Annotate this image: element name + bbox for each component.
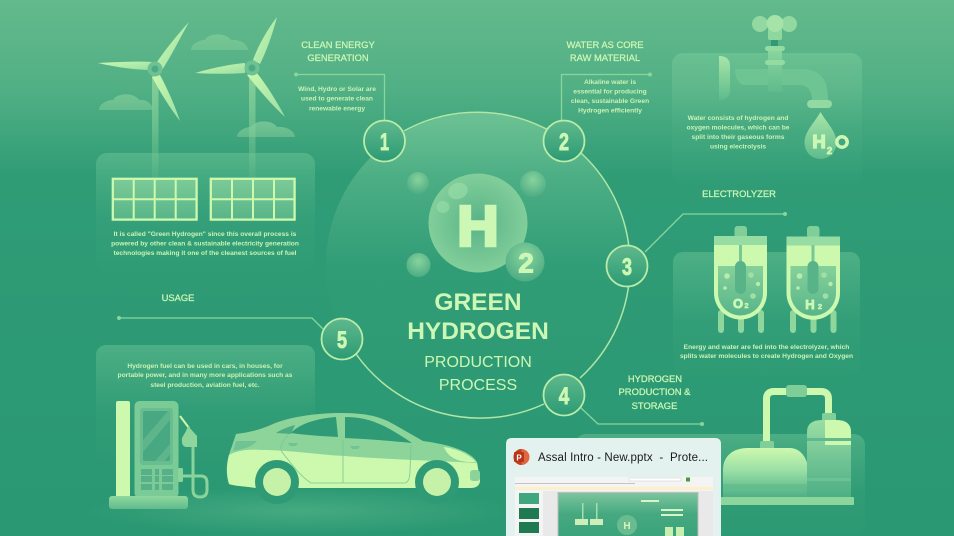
icon: oxygen tank bbox=[714, 226, 767, 333]
icon: small bubble top right bbox=[520, 171, 546, 197]
step 2 badge bbox=[544, 120, 584, 162]
thumbnail of window: H bbox=[623, 521, 631, 532]
step 3 badge: 3 bbox=[622, 254, 632, 281]
central disc with process ring bbox=[326, 112, 630, 418]
icon: hydrogen tank bbox=[786, 226, 840, 333]
heading: clean energy generation bbox=[301, 39, 375, 63]
taskbar preview popup bbox=[506, 438, 721, 536]
heading: clean energy generation: GENERATION bbox=[307, 52, 369, 63]
icon: water drop H2O bbox=[804, 112, 847, 159]
text: step 1 description: renewable energy bbox=[309, 106, 365, 112]
icon: hydrogen bubble bbox=[428, 174, 528, 272]
icon: water drop H2O: H bbox=[812, 131, 826, 152]
text: step 2 description: clean, sustainable Green bbox=[571, 98, 649, 105]
leader line 1 bbox=[294, 72, 384, 120]
text: step 1 description: Wind, Hydro or Solar are bbox=[298, 86, 376, 93]
leader line 3 bbox=[645, 212, 787, 252]
text: usage description bbox=[118, 363, 293, 389]
heading: hydrogen production and storage bbox=[619, 373, 691, 411]
icon: hydrogen tank: 2 bbox=[818, 302, 822, 311]
icon: small bubble bottom left bbox=[406, 253, 430, 277]
icon: powerpoint bbox=[514, 449, 530, 465]
step 3 badge bbox=[606, 246, 648, 286]
title: GREEN bbox=[434, 289, 522, 316]
step 4 badge: 4 bbox=[559, 383, 570, 410]
text: why green hydrogen: It is called "Green Hydrogen" since this overall process is bbox=[114, 231, 297, 238]
subtitle: PRODUCTION bbox=[424, 354, 532, 371]
thumbnail of window bbox=[515, 477, 713, 536]
icon: cloud left bbox=[99, 94, 153, 110]
text: water description bbox=[687, 115, 790, 150]
icon: wind turbine left bbox=[98, 22, 189, 178]
text: electrolyzer description bbox=[680, 344, 853, 360]
icon: cloud right bbox=[237, 121, 295, 137]
text: step 2 description: essential for producing bbox=[573, 88, 647, 96]
text: why green hydrogen bbox=[111, 231, 299, 257]
text: step 1 description: used to generate clean bbox=[301, 96, 373, 102]
step 5 badge bbox=[322, 318, 362, 360]
heading: hydrogen production and storage: PRODUCTION & bbox=[619, 386, 691, 397]
icon: powerpoint: P bbox=[516, 454, 522, 462]
subtitle: PROCESS bbox=[439, 377, 517, 394]
panel: storage bbox=[575, 385, 865, 536]
subtitle bbox=[424, 354, 532, 394]
title bbox=[407, 289, 549, 345]
icon: faucet bbox=[719, 15, 832, 108]
text: step 1 description bbox=[298, 86, 376, 112]
text: why green hydrogen: technologies making it one of the cleanest sources of fuel bbox=[113, 250, 297, 257]
heading: clean energy generation: CLEAN ENERGY bbox=[301, 39, 375, 50]
heading: electrolyzer: ELECTROLYZER bbox=[702, 188, 776, 199]
icon: small bubble top left bbox=[407, 172, 429, 194]
text: electrolyzer description: Energy and water are fed into the electrolyzer, which bbox=[684, 344, 849, 351]
panel: usage bbox=[96, 345, 480, 509]
icon: fuel pump bbox=[109, 401, 207, 509]
leader line 2 bbox=[562, 72, 652, 120]
text: water description: split into their gaseous forms bbox=[692, 134, 785, 141]
icon: car bbox=[227, 413, 480, 504]
panel: water bbox=[672, 15, 862, 185]
icon: oxygen tank: 2 bbox=[744, 301, 749, 310]
heading: water as core raw material: WATER AS CORE bbox=[566, 39, 644, 50]
leader line 4 bbox=[581, 408, 704, 426]
icon: cloud top bbox=[191, 34, 248, 50]
title: HYDROGEN bbox=[407, 318, 549, 345]
panel: clean energy generation bbox=[96, 17, 315, 271]
panel: electrolyzer bbox=[673, 226, 860, 376]
text: water description: Water consists of hydrogen and bbox=[688, 115, 788, 122]
icon: water drop H2O: 2 bbox=[827, 146, 833, 157]
text: water description: using electrolysis bbox=[710, 144, 766, 150]
icon: hydrogen bubble: H bbox=[457, 194, 499, 258]
heading: hydrogen production and storage: STORAGE bbox=[632, 400, 677, 411]
text: step 2 description: Hydrogen efficiently bbox=[578, 108, 642, 114]
step 5 badge: 5 bbox=[337, 327, 347, 354]
icon: subscript 2 bubble bbox=[506, 242, 544, 282]
step 2 badge: 2 bbox=[559, 129, 569, 156]
bottom glow bbox=[85, 487, 515, 535]
icon: hydrogen tank: H bbox=[805, 297, 815, 312]
step 1 badge: 1 bbox=[380, 129, 389, 156]
icon: storage tanks and pipe bbox=[720, 385, 854, 505]
text: electrolyzer description: splits water molecules to create Hydrogen and Oxygen bbox=[680, 353, 853, 360]
icon: oxygen tank: O bbox=[733, 296, 743, 311]
icon: wind turbine right bbox=[195, 17, 285, 178]
text: step 2 description: Alkaline water is bbox=[584, 79, 636, 86]
text: usage description: Hydrogen fuel can be used in cars, in houses, for bbox=[127, 363, 283, 370]
heading: water as core raw material bbox=[566, 39, 644, 63]
icon: solar panel left bbox=[113, 179, 197, 220]
heading: water as core raw material: RAW MATERIAL bbox=[570, 52, 640, 63]
popup title: Assal Intro - New.pptx - Prote... bbox=[538, 452, 708, 464]
text: usage description: steel production, aviation fuel, etc. bbox=[150, 382, 260, 389]
text: usage description: portable power, and in many more applications such as bbox=[118, 372, 293, 379]
heading: hydrogen production and storage: HYDROGEN bbox=[628, 373, 682, 384]
text: water description: oxygen molecules, which can be bbox=[687, 124, 790, 132]
icon: solar panel right bbox=[211, 179, 295, 220]
text: step 2 description bbox=[571, 79, 649, 114]
text: why green hydrogen: powered by other clean & sustainable electricity generation bbox=[111, 240, 299, 248]
heading: usage: USAGE bbox=[162, 292, 194, 303]
icon: subscript 2 bubble: 2 bbox=[518, 248, 534, 278]
leader line 5 bbox=[117, 316, 325, 331]
step 1 badge bbox=[364, 120, 405, 162]
step 4 badge bbox=[544, 374, 584, 416]
